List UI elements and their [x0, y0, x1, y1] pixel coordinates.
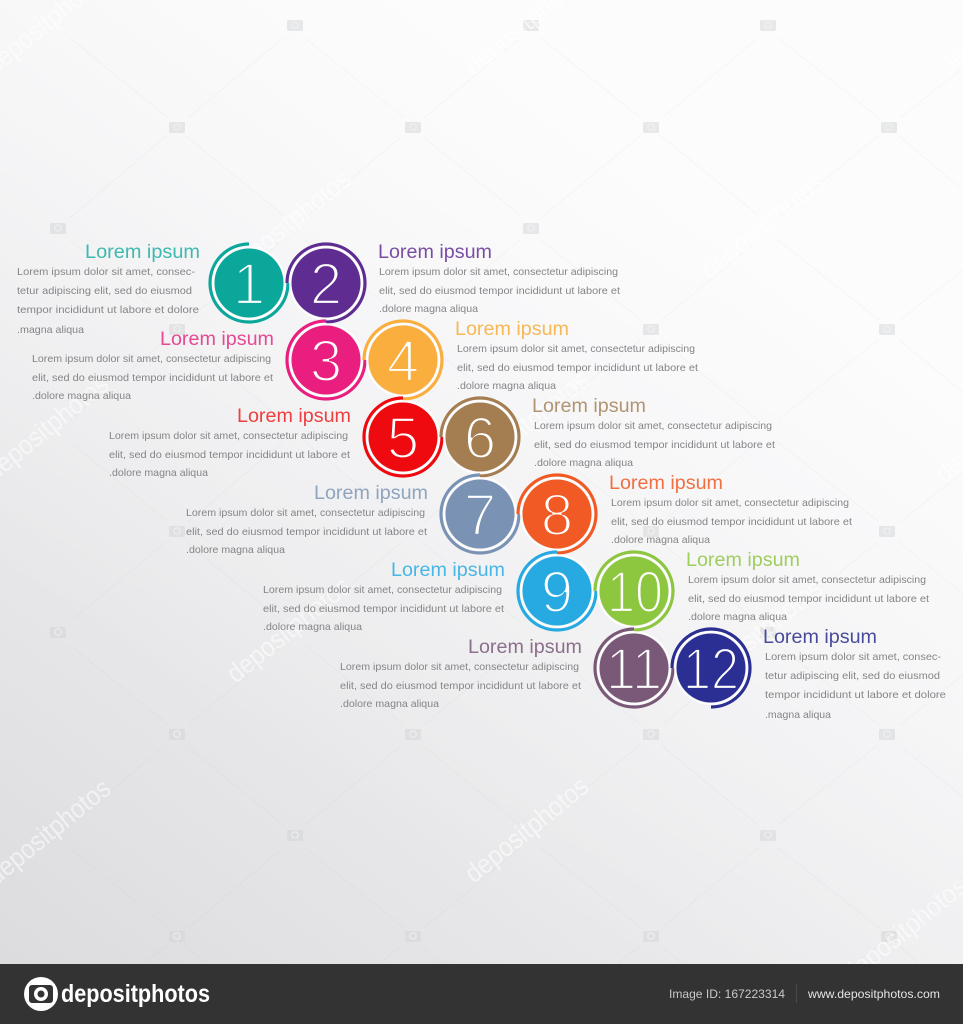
step 4 [364, 319, 698, 399]
step 8 text: elit, sed do eiusmod tempor incididunt ut labore et [611, 516, 852, 528]
step 1 heading: Lorem ipsum [85, 242, 200, 263]
step 5 text: elit, sed do eiusmod tempor incididunt ut labore et [109, 449, 350, 461]
step 12 [672, 627, 946, 721]
footer logo: depositphotos [61, 980, 210, 1008]
step 12 badge: 12 [683, 637, 739, 702]
depositphotos text watermarks: depositphotos [695, 167, 830, 285]
depositphotos text watermarks: depositphotos [693, 573, 828, 691]
step 2 [287, 242, 620, 322]
step 10 badge: 10 [607, 560, 663, 625]
step 10 text: .dolore magna aliqua [688, 611, 787, 623]
step 1 text [17, 266, 199, 336]
step 11 text: elit, sed do eiusmod tempor incididunt ut labore et [340, 680, 581, 692]
step 3 text: elit, sed do eiusmod tempor incididunt ut labore et [32, 372, 273, 384]
depositphotos text watermarks: depositphotos [221, 164, 356, 282]
step 7 text [186, 507, 427, 556]
step 3 text: Lorem ipsum dolor sit amet, consectetur adipiscing [32, 353, 271, 365]
step 5 badge: 5 [387, 406, 419, 471]
step 4 badge [364, 321, 442, 399]
step 2 text: elit, sed do eiusmod tempor incididunt ut labore et [379, 285, 620, 297]
step 12 heading: Lorem ipsum [763, 627, 877, 648]
step 6 [441, 396, 775, 476]
step 6 text: elit, sed do eiusmod tempor incididunt ut labore et [534, 439, 775, 451]
step 12 text: tempor incididunt ut labore et dolore [765, 689, 946, 701]
step 3 badge: 3 [310, 329, 342, 394]
step 2 badge [287, 244, 365, 322]
step 1 badge [210, 244, 288, 322]
step 7 text: Lorem ipsum dolor sit amet, consectetur adipiscing [186, 507, 425, 519]
step 11 heading: Lorem ipsum [468, 637, 582, 658]
depositphotos text watermarks: depositphotos [459, 365, 594, 483]
step 1 [17, 242, 288, 336]
step 2 text: Lorem ipsum dolor sit amet, consectetur adipiscing [379, 266, 618, 278]
depositphotos text watermarks: depositphotos [221, 571, 356, 689]
step 3 badge [287, 321, 365, 399]
step 5 text: Lorem ipsum dolor sit amet, consectetur adipiscing [109, 430, 348, 442]
step 12 text: Lorem ipsum dolor sit amet, consec- [765, 651, 942, 663]
step 5 [109, 398, 442, 479]
step 11 text: Lorem ipsum dolor sit amet, consectetur adipiscing [340, 661, 579, 673]
step 1 text: .magna aliqua [17, 324, 84, 336]
step 10 text: elit, sed do eiusmod tempor incididunt ut labore et [688, 593, 929, 605]
step 3 text [32, 353, 273, 402]
step 10 [595, 550, 929, 630]
step 5 text [109, 430, 350, 479]
step 7 badge [441, 475, 519, 553]
step 10 badge [595, 552, 673, 630]
step 4 text: Lorem ipsum dolor sit amet, consectetur adipiscing [457, 343, 695, 355]
step 9 text: .dolore magna aliqua [263, 621, 362, 633]
step 8 text [611, 497, 852, 546]
step 9 heading: Lorem ipsum [391, 560, 505, 581]
step 11 badge: 11 [606, 637, 662, 702]
step 9 badge: 9 [541, 560, 573, 625]
step 2 badge: 2 [310, 252, 342, 317]
step 5 badge [364, 398, 442, 476]
image id: Image ID: 167223314 [669, 987, 785, 1001]
step 6 badge: 6 [464, 406, 496, 471]
step 1 badge: 1 [233, 252, 265, 317]
step 7 text: .dolore magna aliqua [186, 544, 285, 556]
step 8 text: Lorem ipsum dolor sit amet, consectetur adipiscing [611, 497, 849, 509]
step 7 [186, 475, 519, 556]
step 8 [518, 473, 852, 553]
website: www.depositphotos.com [807, 987, 940, 1001]
step 8 heading: Lorem ipsum [609, 473, 723, 494]
step 9 [263, 552, 596, 633]
step 2 text [379, 266, 620, 315]
step 5 heading: Lorem ipsum [237, 406, 351, 427]
step 7 text: elit, sed do eiusmod tempor incididunt ut labore et [186, 526, 427, 538]
step 5 text: .dolore magna aliqua [109, 467, 208, 479]
step 6 heading: Lorem ipsum [532, 396, 646, 417]
depositphotos text watermarks: depositphotos [459, 771, 594, 889]
step 2 text: .dolore magna aliqua [379, 303, 478, 315]
step 10 heading: Lorem ipsum [686, 550, 800, 571]
camera watermark icons [50, 20, 897, 942]
step 1 text: Lorem ipsum dolor sit amet, consec- [17, 266, 196, 278]
step 12 text [765, 651, 946, 721]
footer bar [0, 964, 963, 1024]
step 10 text: Lorem ipsum dolor sit amet, consectetur adipiscing [688, 574, 926, 586]
step 11 badge [595, 629, 673, 707]
step 8 badge [518, 475, 596, 553]
step 12 text: .magna aliqua [765, 709, 831, 721]
footer logo [24, 977, 210, 1011]
step 1 text: tempor incididunt ut labore et dolore [17, 304, 199, 316]
step 9 badge [518, 552, 596, 630]
step 3 heading: Lorem ipsum [160, 329, 274, 350]
step 3 text: .dolore magna aliqua [32, 390, 131, 402]
step 6 badge [441, 398, 519, 476]
step 8 badge: 8 [541, 483, 573, 548]
step 7 heading: Lorem ipsum [314, 483, 428, 504]
step 10 text [688, 574, 929, 623]
step 9 text [263, 584, 504, 633]
step 3 [32, 321, 365, 402]
step 4 badge: 4 [387, 329, 419, 394]
step 6 text: Lorem ipsum dolor sit amet, consectetur adipiscing [534, 420, 772, 432]
step 8 text: .dolore magna aliqua [611, 534, 710, 546]
step 6 text: .dolore magna aliqua [534, 457, 633, 469]
step 1 text: tetur adipiscing elit, sed do eiusmod [17, 285, 192, 297]
step 11 text: .dolore magna aliqua [340, 698, 439, 710]
step 4 text: elit, sed do eiusmod tempor incididunt ut labore et [457, 362, 698, 374]
step 12 text: tetur adipiscing elit, sed do eiusmod [765, 670, 940, 682]
step 4 text: .dolore magna aliqua [457, 380, 556, 392]
step 4 heading: Lorem ipsum [455, 319, 569, 340]
step 12 badge [672, 629, 750, 707]
step 7 badge: 7 [464, 483, 496, 548]
step 4 text [457, 343, 698, 392]
step 9 text: Lorem ipsum dolor sit amet, consectetur adipiscing [263, 584, 502, 596]
step 6 text [534, 420, 775, 469]
step 11 text [340, 661, 581, 710]
step 2 heading: Lorem ipsum [378, 242, 492, 263]
step 11 [340, 629, 673, 710]
step 9 text: elit, sed do eiusmod tempor incididunt ut labore et [263, 603, 504, 615]
